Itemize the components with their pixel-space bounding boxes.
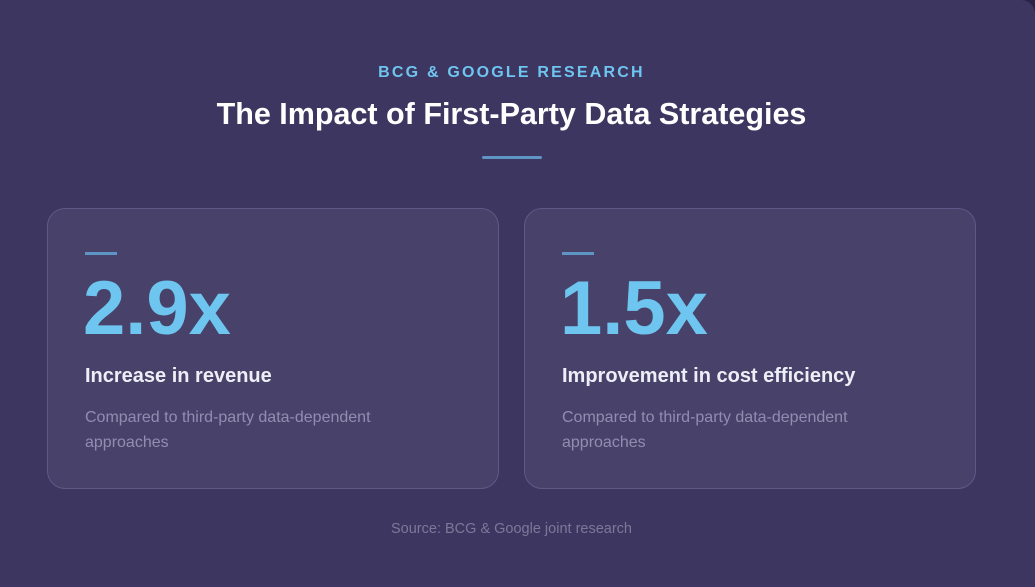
description: Compared to third-party data-dependent approaches bbox=[562, 409, 848, 451]
stat label: Increase in revenue bbox=[85, 365, 272, 387]
stat number: 2.9x bbox=[83, 266, 231, 351]
title underline bbox=[482, 156, 542, 159]
stat number: 1.5x bbox=[560, 266, 708, 351]
source note: Source: BCG & Google joint research bbox=[391, 521, 632, 537]
dash accent bbox=[562, 252, 594, 255]
panel: revenue bbox=[47, 208, 499, 489]
dash accent bbox=[85, 252, 117, 255]
eyebrow label: BCG & GOOGLE RESEARCH bbox=[378, 64, 645, 81]
title: The Impact of First-Party Data Strategies bbox=[217, 97, 806, 131]
description: Compared to third-party data-dependent approaches bbox=[85, 409, 371, 451]
panel: cost efficiency bbox=[524, 208, 976, 489]
stat label: Improvement in cost efficiency bbox=[562, 365, 855, 387]
